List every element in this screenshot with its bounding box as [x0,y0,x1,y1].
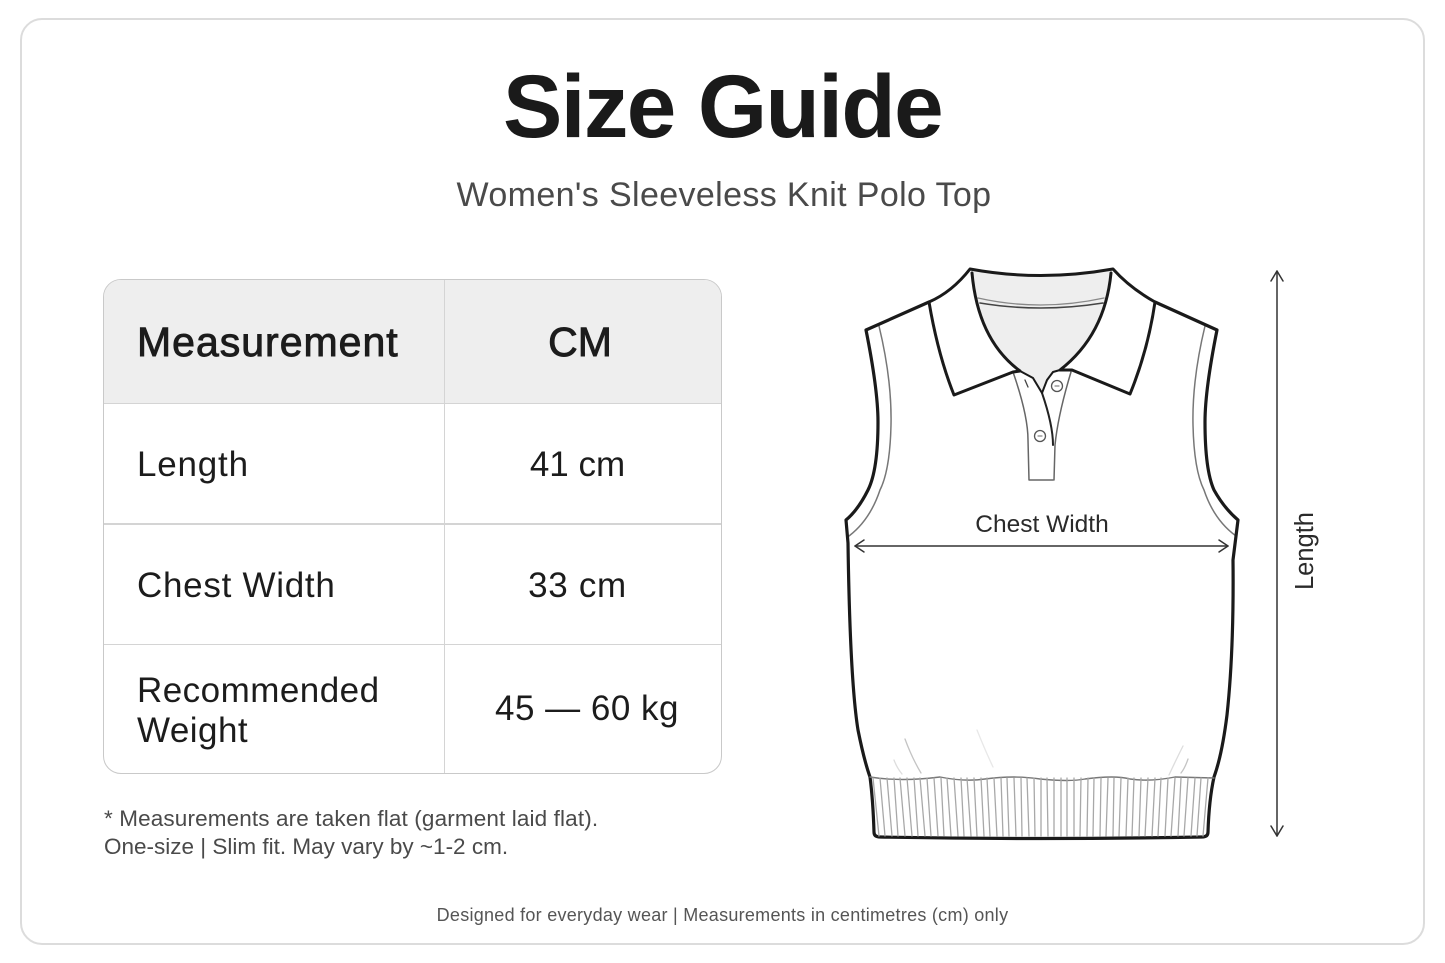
chest width label: Chest Width [975,511,1109,538]
footnote [104,806,598,859]
row divider: chest [104,644,721,645]
row label: recommended weight: Recommended [137,671,380,710]
garment body outline [846,302,1238,838]
header: measurement: Measurement [137,319,399,365]
armhole trim lines [849,326,1236,536]
measurement table [103,279,722,774]
placket [1013,372,1071,480]
footnote: One-size | Slim fit. May vary by ~1-2 cm. [104,834,508,859]
button upper [1052,380,1062,392]
row value: recommended weight: 45 — 60 kg [495,689,679,728]
row value: chest width: 33 cm [528,566,627,605]
collar [929,269,1155,395]
button lower [1034,430,1046,442]
neck seam [978,298,1104,308]
row label: chest width: Chest Width [137,566,336,605]
length label: Length [1291,512,1319,590]
footnote: * Measurements are taken flat (garment laid flat). [104,806,598,831]
hem gathers [894,730,1188,775]
inner neck [971,270,1112,393]
row value: length: 41 cm [530,445,625,484]
title: Size Guide [503,56,942,156]
row divider: length [104,523,721,524]
column divider [444,280,445,773]
footer note: Designed for everyday wear | Measurements in centimetres (cm) only [437,905,1008,925]
subtitle: Women's Sleeveless Knit Polo Top [457,176,991,214]
header: cm: CM [548,319,612,365]
hem ribbing [870,777,1214,836]
row label: recommended weight: Weight [137,710,248,750]
length arrow [1271,271,1283,836]
row label: recommended weight [137,671,380,750]
table header [104,280,721,404]
row label: length: Length [137,445,249,484]
chest width arrow [855,540,1228,552]
